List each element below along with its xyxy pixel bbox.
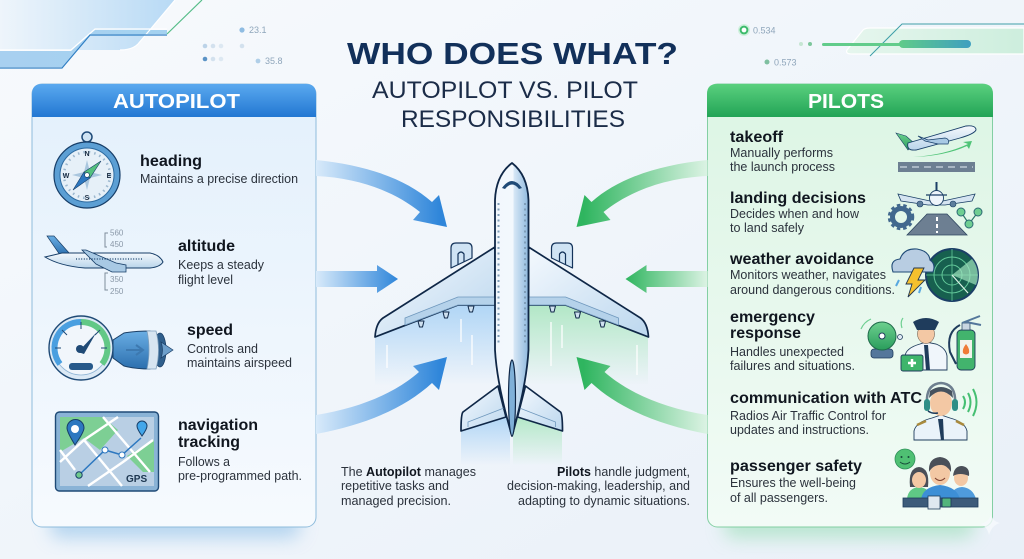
- icon: airplane with altitude scale: 450: [110, 240, 124, 249]
- emergency response text: response: [730, 325, 801, 342]
- icon: speed gauge and engine: [49, 316, 173, 380]
- weather avoidance text: around dangerous conditions.: [730, 282, 895, 297]
- navigation tracking text: navigation: [178, 417, 258, 434]
- subtitle: AUTOPILOT VS. PILOT: [372, 77, 638, 104]
- navigation tracking text: pre-programmed path.: [178, 468, 302, 483]
- glow under wings: [375, 305, 648, 465]
- summary: autopilot: repetitive tasks and: [341, 479, 449, 493]
- heading text: heading: [140, 153, 202, 170]
- icon: airplane with altitude scale: 560: [110, 228, 124, 238]
- icon: airplane with altitude scale: 250: [110, 287, 124, 296]
- speed text: maintains airspeed: [187, 355, 292, 370]
- landing decisions text: Decides when and how: [730, 206, 860, 221]
- icon: compass: S: [85, 195, 90, 202]
- subtitle: [372, 77, 638, 133]
- decoration: top-right data dots: 0.534: [753, 26, 776, 36]
- icon: passengers with seat belt: [895, 449, 978, 509]
- altitude text: [178, 238, 264, 287]
- panel: pilots: [707, 84, 993, 538]
- window rows: [498, 203, 525, 345]
- takeoff text: Manually performs: [730, 145, 833, 160]
- icon: compass: W: [63, 173, 70, 180]
- passenger safety text: passenger safety: [730, 458, 862, 475]
- altitude text: altitude: [178, 238, 235, 255]
- decoration: top-left data dots: [203, 25, 283, 66]
- icon: weather radar: [892, 249, 978, 301]
- tailplanes: [461, 386, 562, 431]
- arrow: pilots middle: [626, 265, 708, 293]
- engines: [451, 243, 572, 268]
- decoration: top-left data dots: 23.1: [249, 25, 267, 35]
- navigation tracking text: tracking: [178, 434, 240, 451]
- title: WHO DOES WHAT?: [347, 36, 678, 71]
- icon: compass: [54, 132, 120, 208]
- heading text: [140, 153, 298, 186]
- summary: autopilot: The Autopilot manages: [341, 465, 476, 479]
- icon: GPS map: GPS: [126, 474, 147, 485]
- altitude text: Keeps a steady: [178, 257, 264, 272]
- icon: airplane with altitude scale: [45, 228, 163, 296]
- autopilot header: [32, 84, 316, 117]
- summary: autopilot: managed precision.: [341, 494, 451, 508]
- landing decisions text: [730, 190, 866, 235]
- speed text: [187, 322, 292, 370]
- weather avoidance text: Monitors weather, navigates: [730, 267, 886, 282]
- altitude text: flight level: [178, 272, 233, 287]
- weather avoidance text: [729, 251, 895, 297]
- decoration: sparkle: [980, 514, 1000, 535]
- central airplane: [375, 163, 648, 436]
- icon: airplane with altitude scale: 350: [110, 275, 124, 284]
- arrow: pilots bottom: [576, 357, 708, 434]
- subtitle: RESPONSIBILITIES: [401, 106, 625, 133]
- speed text: Controls and: [187, 341, 258, 356]
- summary: pilots: Pilots handle judgment,: [557, 465, 690, 479]
- icon: emergency equipment: [861, 316, 981, 371]
- decoration: top-left data dots: 35.8: [265, 56, 283, 66]
- decoration: top-right circuit band: [799, 24, 1024, 56]
- takeoff text: takeoff: [730, 129, 784, 146]
- communication with ATC text: communication with ATC: [730, 390, 922, 407]
- takeoff text: [730, 129, 835, 174]
- passenger safety text: of all passengers.: [730, 490, 828, 505]
- communication with ATC text: Radios Air Traffic Control for: [730, 408, 887, 423]
- navigation tracking text: [178, 417, 302, 483]
- arrow: pilots top: [576, 160, 708, 227]
- communication with ATC text: updates and instructions.: [730, 422, 869, 437]
- arrow: autopilot top: [316, 160, 447, 227]
- decoration: top-right data dots: 0.573: [774, 58, 797, 68]
- icon: compass: N: [84, 151, 90, 158]
- summary: pilots: decision-making, leadership, and: [507, 479, 690, 493]
- icon: pilot with headset: [914, 383, 976, 440]
- pilots header: [707, 84, 993, 117]
- landing decisions text: to land safely: [730, 220, 804, 235]
- emergency response text: [730, 309, 855, 373]
- autopilot header: AUTOPILOT: [113, 91, 240, 113]
- heading text: Maintains a precise direction: [140, 171, 298, 186]
- icon: takeoff: [896, 126, 976, 172]
- emergency response text: Handles unexpected: [730, 344, 844, 359]
- decoration: top-left circuit band: [0, 0, 202, 68]
- emergency response text: failures and situations.: [730, 358, 855, 373]
- fuselage: [495, 163, 528, 436]
- navigation tracking text: Follows a: [178, 454, 231, 469]
- panel: autopilot: [32, 84, 316, 538]
- emergency response text: emergency: [730, 309, 815, 326]
- arrow: autopilot middle: [316, 265, 398, 293]
- icon: GPS map: [56, 412, 158, 491]
- vertical fin: [508, 360, 516, 436]
- icon: landing: [889, 182, 982, 235]
- communication with ATC text: [730, 390, 922, 437]
- passenger safety text: Ensures the well-being: [730, 475, 856, 490]
- summary: pilots: [507, 465, 690, 508]
- passenger safety text: [730, 458, 862, 505]
- decoration: top-right data dots: [738, 24, 797, 68]
- speed text: speed: [187, 322, 233, 339]
- takeoff text: the launch process: [730, 159, 835, 174]
- arrow: autopilot bottom: [316, 357, 447, 434]
- landing decisions text: landing decisions: [730, 190, 866, 207]
- icon: compass: E: [107, 173, 112, 180]
- weather avoidance text: weather avoidance: [729, 251, 874, 268]
- cockpit: [502, 181, 522, 189]
- summary: pilots: adapting to dynamic situations.: [518, 494, 690, 508]
- wings: [375, 247, 648, 337]
- summary: autopilot: [341, 465, 476, 508]
- pilots header: PILOTS: [808, 91, 884, 113]
